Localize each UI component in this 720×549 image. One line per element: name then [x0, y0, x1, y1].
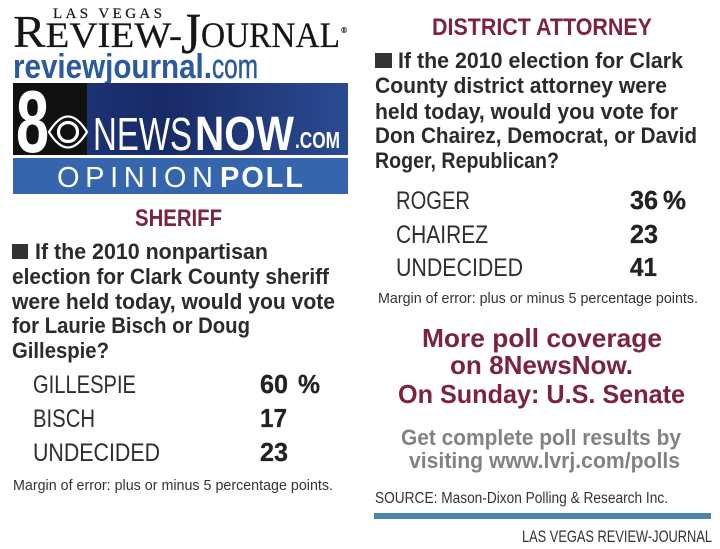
masthead: Las Vegas Review-Journal: J — [181, 1, 201, 66]
district attorney poll results: 23 — [630, 219, 658, 249]
district attorney margin of error: Margin of error: plus or minus 5 percentage points. — [378, 291, 698, 307]
panel: sheriff question: If the 2010 nonpartisan — [35, 239, 268, 264]
logo banner: 8 News Now: .COM — [295, 127, 340, 153]
panel: sheriff question: Gillespie? — [12, 338, 109, 363]
logo banner: 8 News Now: NEWS — [93, 108, 192, 160]
website: reviewjournal.com: reviewjournal. — [13, 48, 212, 86]
logo banner: 8 News Now: 8 — [16, 72, 49, 171]
panel: district attorney question: Don Chairez, Democrat, or David — [375, 123, 697, 148]
callout: more poll coverage — [398, 323, 685, 409]
website: reviewjournal.com: com — [212, 48, 258, 86]
icon: CBS eye — [49, 116, 87, 148]
masthead: Las Vegas Review-Journal: REVIEW- — [13, 7, 182, 57]
sheriff poll results: % — [298, 369, 320, 399]
masthead: Las Vegas Review-Journal — [13, 1, 347, 66]
panel: district attorney question: Roger, Republican? — [375, 148, 559, 173]
callout: more poll coverage: More poll coverage — [422, 323, 662, 353]
district attorney poll results: UNDECIDED — [396, 254, 523, 282]
heading: district attorney: DISTRICT ATTORNEY — [432, 14, 652, 41]
heading: sheriff: SHERIFF — [135, 205, 222, 232]
panel: district attorney question: County district attorney were — [375, 73, 667, 98]
panel: sheriff question: were held today, would you vote — [11, 289, 335, 314]
district attorney poll results: ROGER — [396, 187, 470, 215]
opinion poll bar — [13, 158, 348, 194]
panel: district attorney question: If the 2010 election for Clark — [398, 48, 684, 73]
district attorney poll results: CHAIREZ — [396, 221, 488, 249]
masthead: Las Vegas Review-Journal: LAS VEGAS — [53, 6, 162, 22]
callout: more poll coverage: on 8NewsNow. — [450, 350, 633, 380]
callout: complete poll results: Get complete poll results by — [401, 425, 682, 450]
opinion poll bar: POLL — [220, 162, 303, 194]
opinion poll bar: OPINION — [57, 162, 213, 194]
sheriff poll results: BISCH — [33, 405, 95, 433]
district attorney poll results: 36 — [630, 185, 658, 215]
logo banner: 8 News Now: NOW — [195, 108, 295, 161]
sheriff poll results: 23 — [260, 437, 288, 467]
sheriff poll results: UNDECIDED — [33, 439, 160, 467]
district attorney poll results: % — [663, 185, 686, 215]
district attorney poll results — [396, 185, 686, 282]
sheriff poll results — [33, 369, 320, 467]
sheriff poll results: 17 — [260, 403, 287, 433]
masthead: Las Vegas Review-Journal: OURNAL — [201, 15, 340, 55]
sheriff poll results: GILLESPIE — [33, 371, 136, 399]
panel: district attorney question: held today, would you vote for — [375, 99, 678, 124]
callout: complete poll results: visiting www.lvrj.com/polls — [409, 448, 680, 473]
panel: sheriff question: for Laurie Bisch or Doug — [12, 313, 250, 338]
sheriff margin of error: Margin of error: plus or minus 5 percentage points. — [13, 478, 333, 494]
district attorney poll results: 41 — [630, 252, 657, 282]
panel: district attorney question — [375, 48, 697, 173]
logo banner: 8 News Now — [13, 72, 348, 171]
callout: more poll coverage: On Sunday: U.S. Senate — [398, 379, 685, 409]
masthead: Las Vegas Review-Journal: ® — [341, 26, 347, 35]
callout: complete poll results — [401, 425, 682, 473]
sheriff poll results: 60 — [260, 369, 288, 399]
panel: sheriff question: election for Clark County sheriff — [12, 264, 330, 289]
source note: SOURCE: Mason-Dixon Polling & Research Inc. — [375, 490, 668, 507]
panel: sheriff question — [11, 239, 335, 363]
